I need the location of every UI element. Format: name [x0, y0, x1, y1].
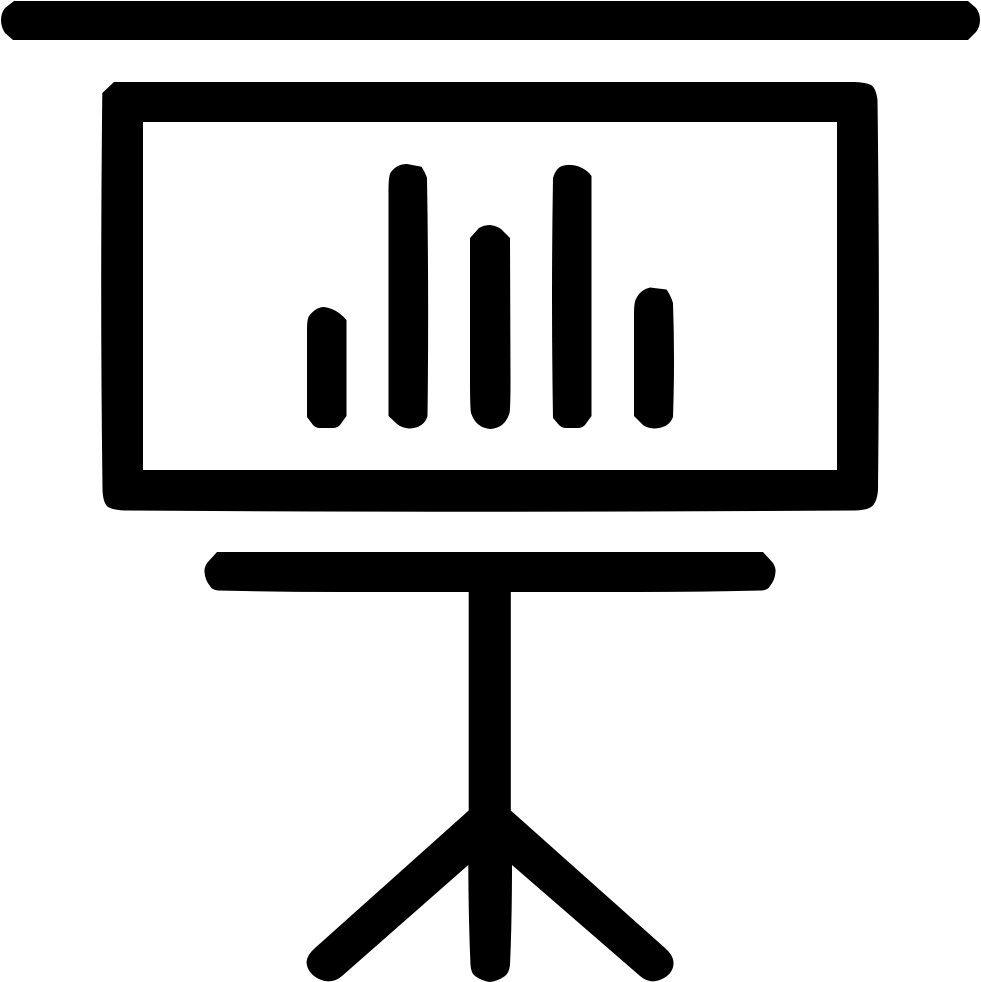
bar 1	[307, 307, 346, 428]
screen frame	[101, 82, 879, 512]
bar chart	[307, 164, 674, 429]
stand crossbar	[204, 552, 776, 592]
bar 3	[470, 225, 510, 429]
bar 4	[552, 165, 592, 428]
bar 2	[388, 164, 428, 428]
stand pole and tripod legs	[306, 591, 674, 982]
top rail	[1, 1, 980, 40]
bar 5	[634, 288, 674, 428]
